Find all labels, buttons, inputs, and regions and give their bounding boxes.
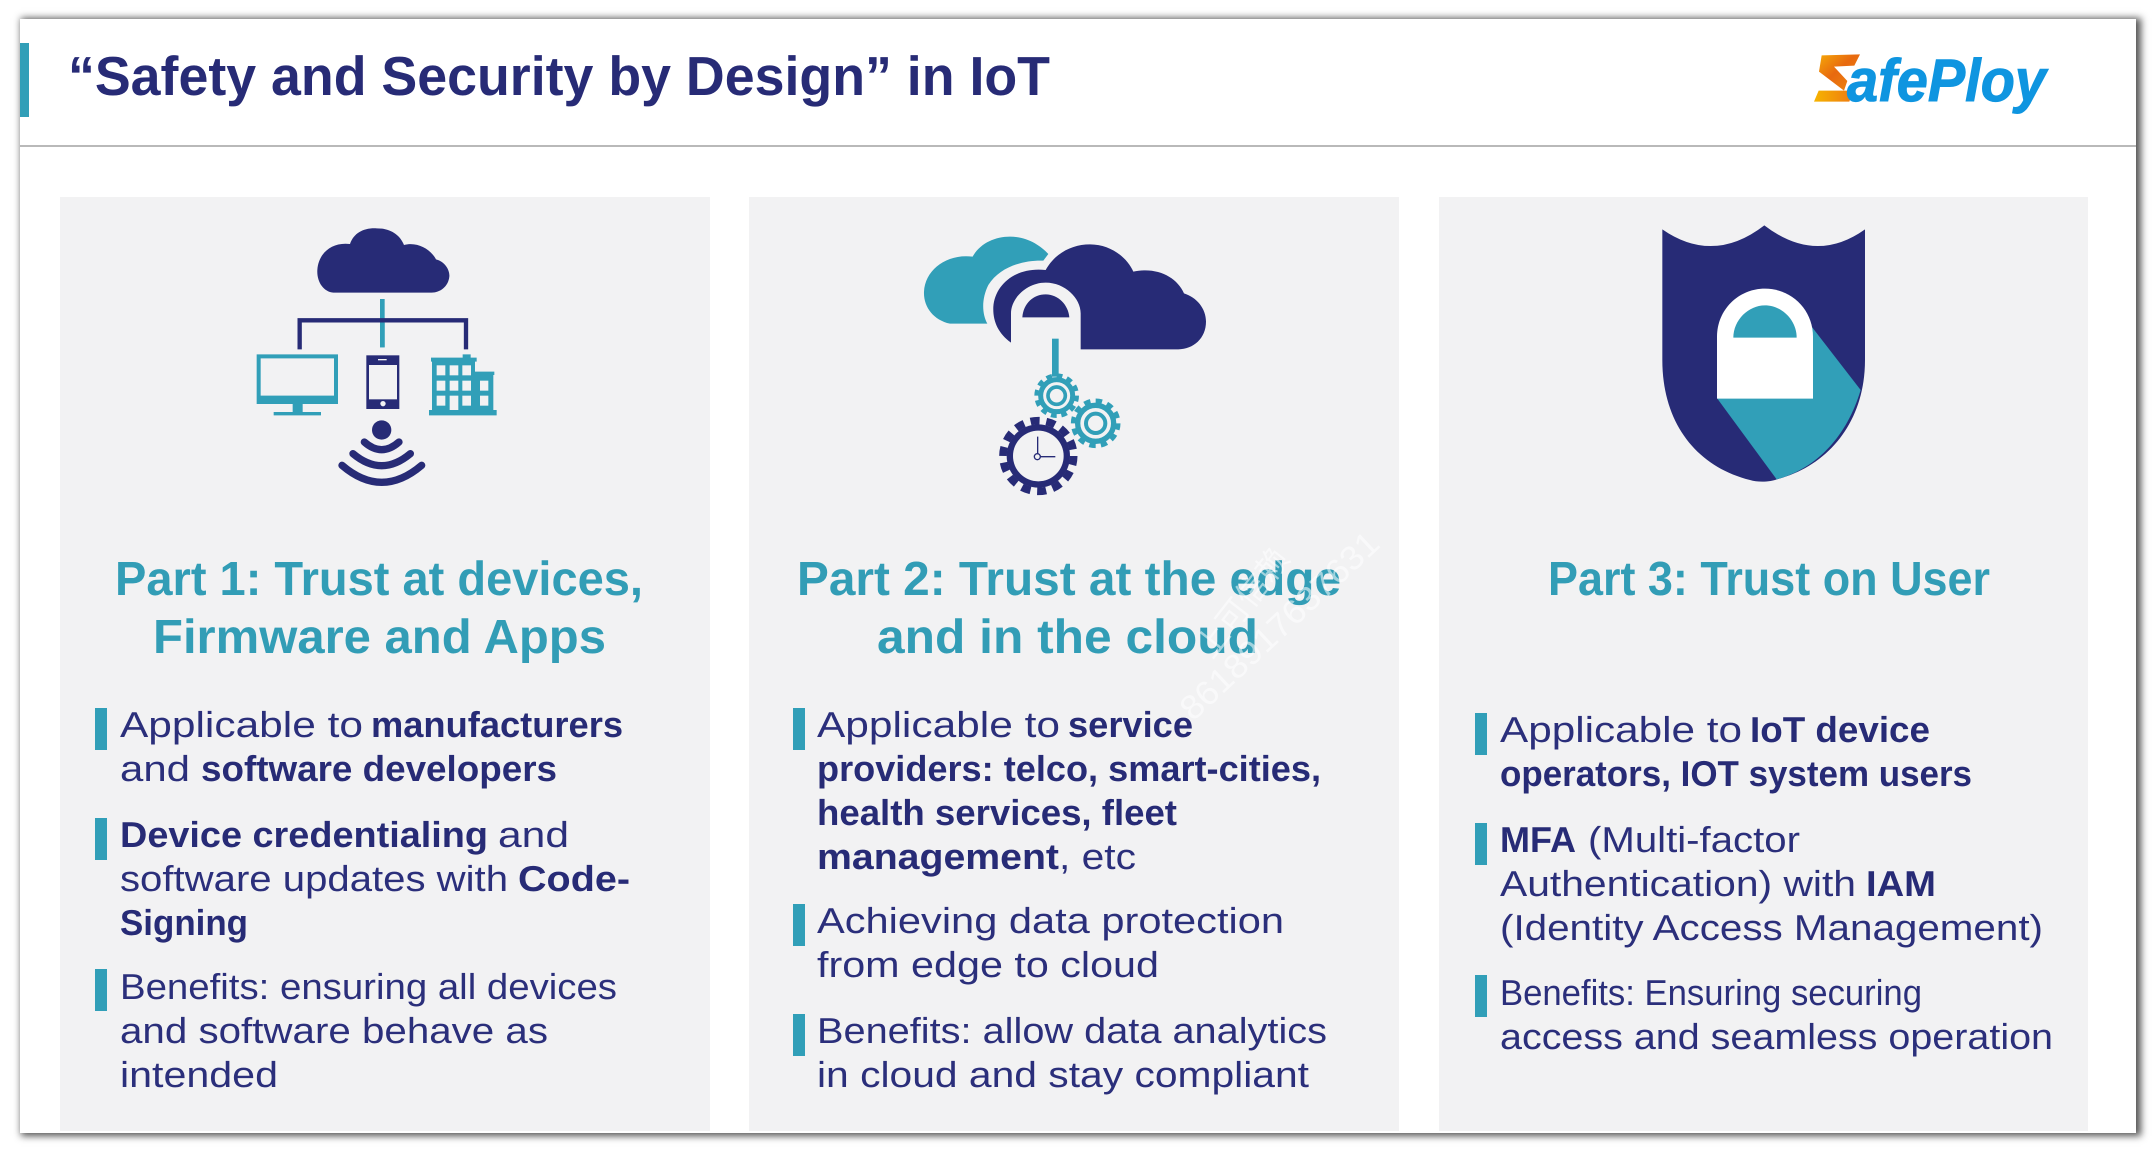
- bullet: benefits: and software behave as: [120, 1010, 548, 1051]
- bullet: applicable to IoT operators: [1475, 709, 1972, 794]
- bullet: benefits: Benefits: Ensuring securing: [1500, 972, 1922, 1013]
- bullet: MFA with IAM: (Multi-factor: [1588, 819, 1800, 860]
- logo: SafePloy: afePloy: [1847, 47, 2048, 114]
- bullet: data protection: from edge to cloud: [817, 944, 1159, 985]
- bullet: applicable to service providers: health services, fleet: [817, 792, 1177, 833]
- bullet: benefits: access and seamless operation: [1500, 1016, 2053, 1057]
- heading: part 2: Part 2: Trust at the edge: [797, 553, 1341, 606]
- bullet: device credentialing: and: [498, 814, 569, 855]
- bullet: MFA with IAM: Authentication) with: [1500, 863, 1856, 904]
- bullet: MFA with IAM: [1475, 819, 2043, 948]
- bullet: benefits: intended: [120, 1054, 278, 1095]
- bullet: MFA with IAM: IAM: [1866, 863, 1936, 904]
- icon: shield with lock: [1662, 225, 1865, 482]
- bullet: data protection: [793, 900, 1284, 985]
- bullet: applicable to manufacturers: software developers: [201, 748, 557, 789]
- heading: part 1: Firmware and Apps: [153, 611, 606, 664]
- header divider: [20, 145, 2136, 147]
- bullet: MFA with IAM: MFA: [1500, 819, 1576, 860]
- bullet: device credentialing: Signing: [120, 902, 248, 943]
- heading: part 2: [797, 553, 1341, 664]
- bullet: applicable to IoT operators: Applicable to: [1500, 709, 1742, 750]
- bullet: applicable to manufacturers: Applicable to: [120, 704, 363, 745]
- icon: cloud connected devices: [257, 228, 497, 482]
- bullet: MFA with IAM: (Identity Access Management): [1500, 907, 2043, 948]
- bullet: device credentialing: Device credentialing: [120, 814, 488, 855]
- bullet: benefits: [95, 966, 617, 1095]
- watermark: 8618917637631: [1173, 524, 1387, 728]
- bullet: applicable to IoT operators: IoT device: [1750, 709, 1930, 750]
- bullet: applicable to manufacturers: manufacturers: [371, 704, 623, 745]
- bullet: applicable to manufacturers: [95, 704, 623, 789]
- bullet: device credentialing: [95, 814, 630, 943]
- panel: part 1: [60, 197, 710, 1131]
- bullet: applicable to service providers: [793, 704, 1321, 877]
- bullet: benefits: Benefits: ensuring all devices: [120, 966, 617, 1007]
- heading: part 3: Part 3: Trust on User: [1548, 553, 1990, 606]
- title: “Safety and Security by Design” in IoT: [68, 45, 1050, 107]
- bullet: benefits: [793, 1010, 1327, 1095]
- bullet: applicable to service providers: providers: telco, smart-cities,: [817, 748, 1321, 789]
- bullet: applicable to manufacturers: and: [120, 748, 190, 789]
- watermark: 上可信赖: [1189, 541, 1296, 664]
- bullet: applicable to service providers: , etc: [1059, 836, 1136, 877]
- panel: part 2: [749, 197, 1399, 1131]
- bullet: benefits: Benefits: allow data analytics: [817, 1010, 1327, 1051]
- heading: part 2: and in the cloud: [877, 611, 1258, 664]
- bullet: benefits: [1475, 972, 2053, 1057]
- bullet: device credentialing: Code-: [518, 858, 630, 899]
- header accent bar: [20, 43, 29, 117]
- bullet: data protection: Achieving data protection: [817, 900, 1284, 941]
- bullet: applicable to service providers: service: [1068, 704, 1193, 745]
- panel: part 3: [1439, 197, 2088, 1131]
- icon: cloud lock and gears: [924, 237, 1206, 491]
- bullet: benefits: in cloud and stay compliant: [817, 1054, 1309, 1095]
- heading: part 1: Part 1: Trust at devices,: [115, 553, 643, 606]
- heading: part 1: [115, 553, 643, 664]
- bullet: applicable to IoT operators: operators, IOT system users: [1500, 753, 1972, 794]
- bullet: device credentialing: software updates with: [120, 858, 508, 899]
- bullet: applicable to service providers: Applicable to: [817, 704, 1060, 745]
- bullet: applicable to service providers: management: [817, 836, 1059, 877]
